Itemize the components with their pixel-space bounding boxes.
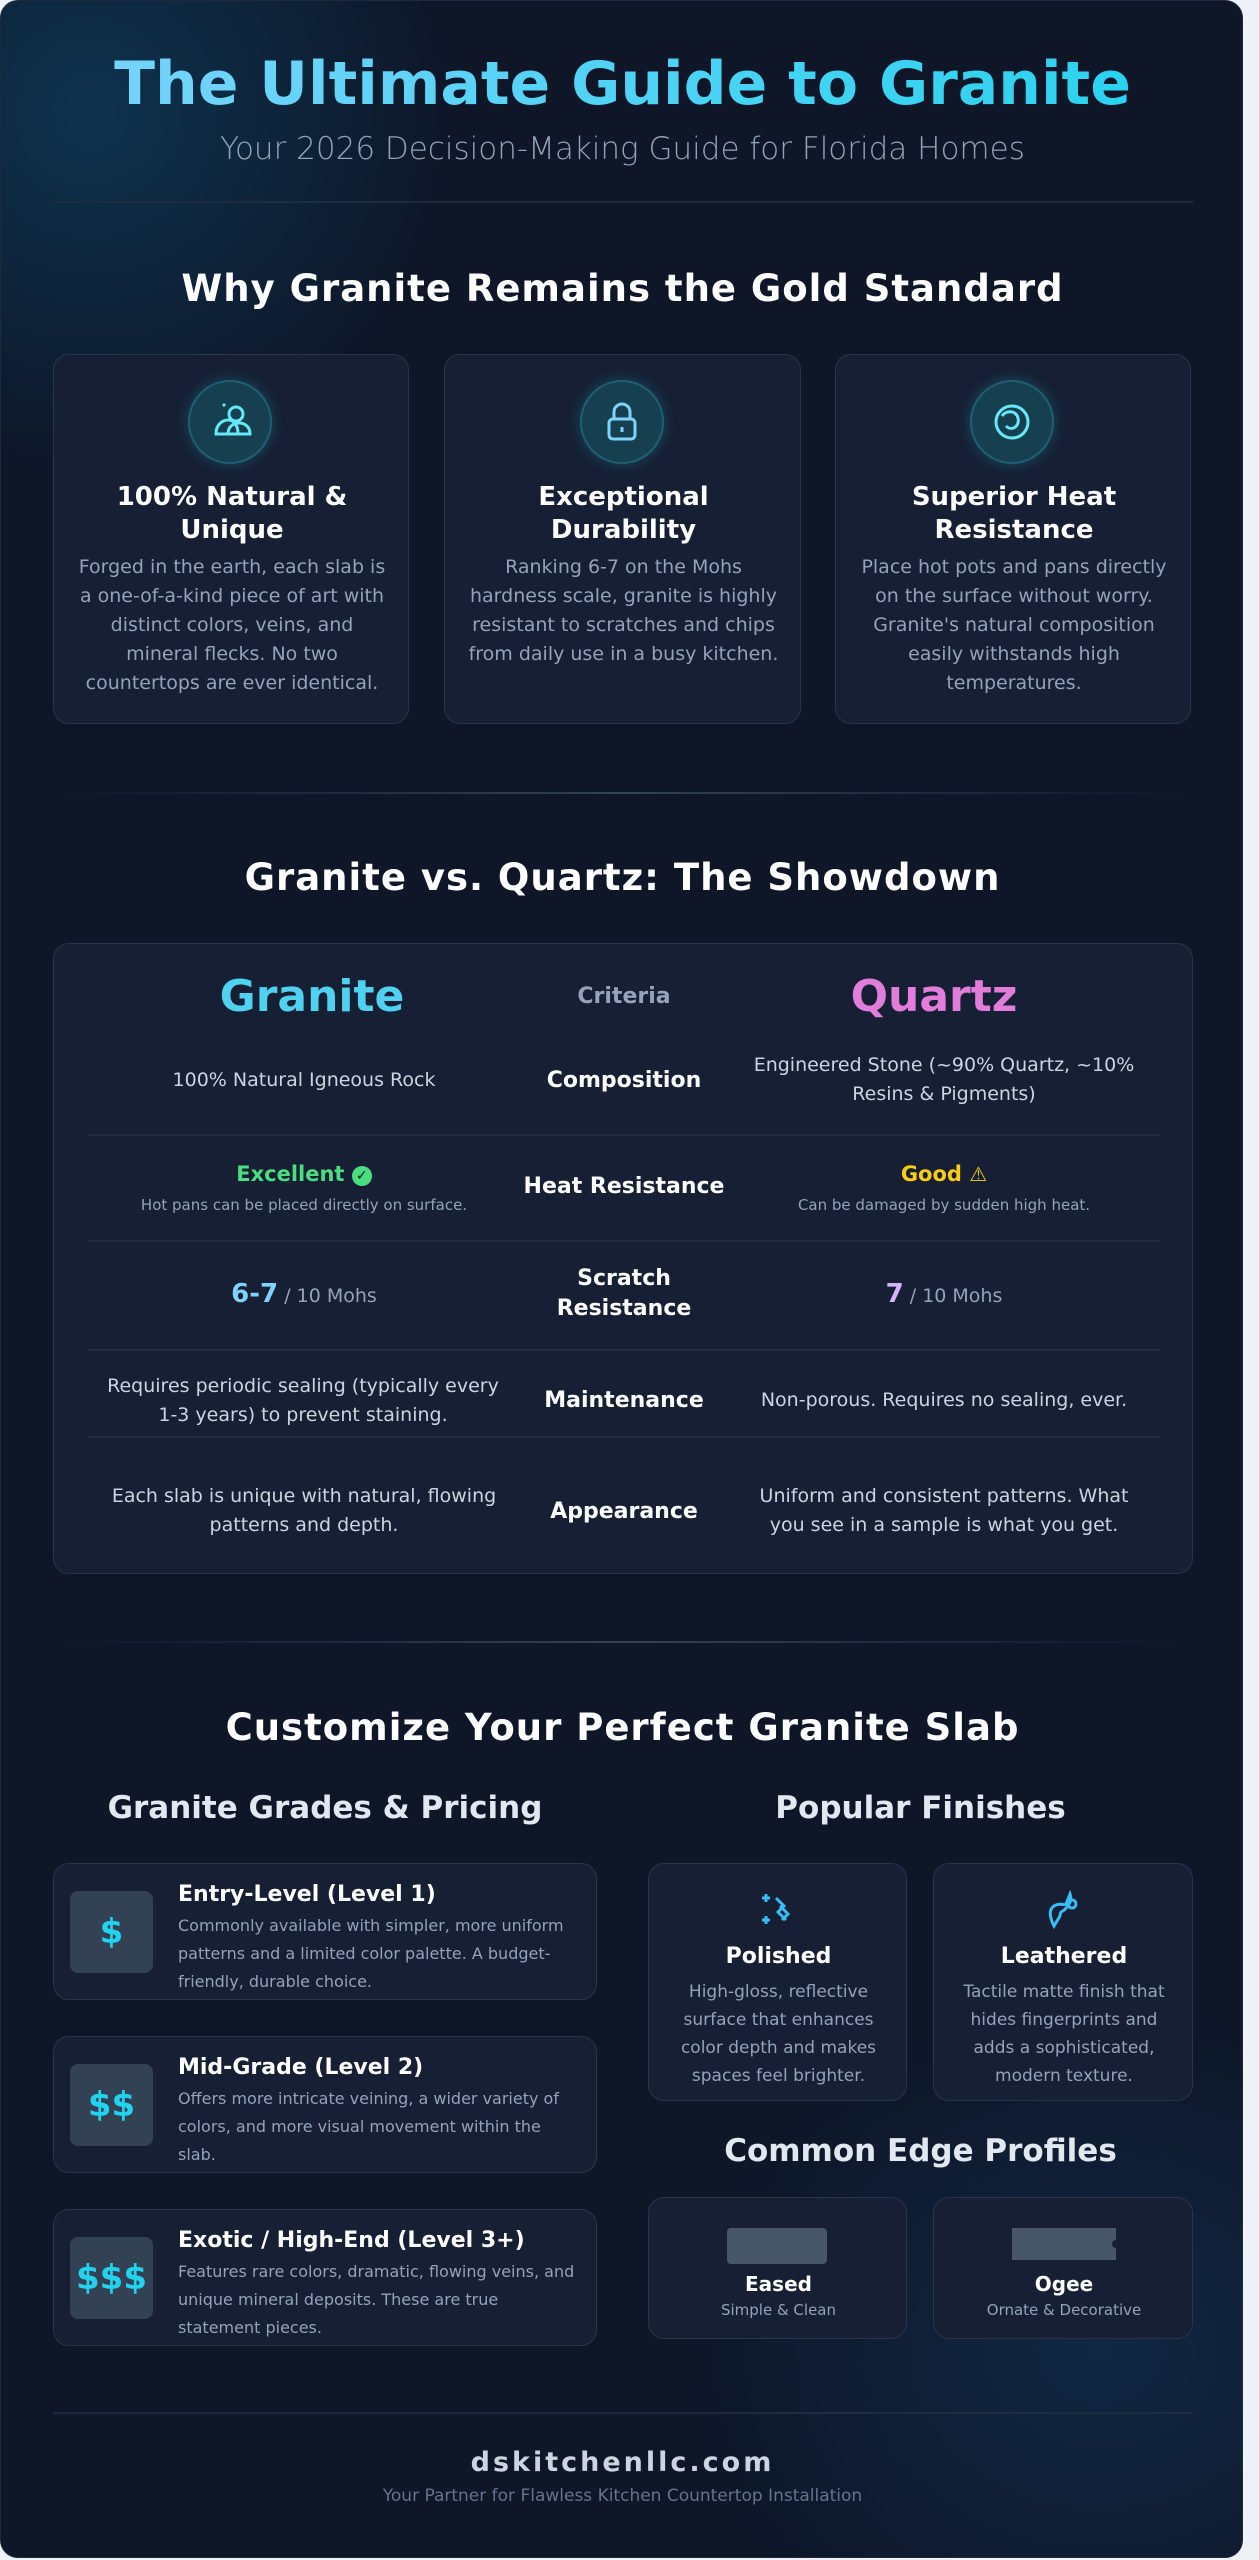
panel: durability: Durability	[551, 515, 696, 545]
edge card: ogee	[933, 2197, 1193, 2339]
subtitle: Your 2026 Decision-Making Guide for Florida Homes	[220, 131, 1025, 167]
panel: natural: 100% Natural &	[117, 482, 347, 512]
icon: lock	[580, 380, 664, 464]
panel: comparison table: Engineered Stone (~90% Quartz, ~10% Resins & Pigments)	[754, 1054, 1134, 1105]
panel: comparison table: Composition	[547, 1068, 701, 1093]
grade card: mid	[53, 2036, 597, 2173]
grade card: exotic: Features rare colors, dramatic, flowing veins, and unique mineral deposits. These are true statement pieces.	[178, 2262, 574, 2337]
panel: heat: Resistance	[934, 515, 1094, 545]
grade card: entry: $	[100, 1912, 123, 1952]
panel: comparison table: Good ⚠	[901, 1162, 987, 1186]
edge card: eased	[648, 2197, 907, 2339]
heading: showdown: Granite vs. Quartz: The Showdown	[245, 856, 1000, 899]
panel: natural: Forged in the earth, each slab is a one-of-a-kind piece of art with distinct colors, veins, and mineral flecks. No two countertops are ever identical.	[79, 556, 385, 694]
edge card: ogee: Ornate & Decorative	[987, 2301, 1141, 2319]
grade card: mid: Offers more intricate veining, a wider variety of colors, and more visual movement within the slab.	[178, 2089, 559, 2164]
panel: heat	[835, 354, 1191, 724]
panel: comparison table: Maintenance	[544, 1388, 704, 1413]
finish card: leathered: Leathered	[1001, 1944, 1127, 1969]
panel: natural: Unique	[180, 515, 284, 545]
heading: grades: Granite Grades & Pricing	[108, 1790, 542, 1826]
edge card: eased: Simple & Clean	[721, 2301, 836, 2319]
edge card: ogee: Ogee	[1035, 2272, 1093, 2296]
panel: comparison table: Hot pans can be placed directly on surface.	[141, 1196, 467, 1214]
heading: finishes: Popular Finishes	[775, 1790, 1066, 1826]
finish card: leathered: Tactile matte finish that hides fingerprints and adds a sophisticated, modern texture.	[963, 1982, 1165, 2086]
finish card: leathered	[933, 1863, 1193, 2101]
title: The Ultimate Guide to Granite	[114, 49, 1131, 119]
footer: site: dskitchenllc.com	[471, 2447, 774, 2478]
panel: comparison table: Appearance	[550, 1499, 698, 1524]
grade card: mid: Mid-Grade (Level 2)	[178, 2055, 423, 2080]
grade card: entry: Commonly available with simpler, more uniform patterns and a limited color palette. A budget-friendly, durable choice.	[178, 1916, 564, 1991]
grade card: mid: $$	[88, 2085, 135, 2125]
row: maintenance: Requires periodic sealing (typically every 1‑3 years) to prevent staining.	[107, 1375, 499, 1426]
row: heat: Excellent	[236, 1162, 344, 1186]
header: criteria: Criteria	[577, 984, 671, 1009]
heading: customize: Customize Your Perfect Granite Slab	[226, 1706, 1019, 1749]
panel: heat: Place hot pots and pans directly on the surface without worry. Granite's natural composition easily withstands high temperatures.	[861, 556, 1167, 694]
panel: durability	[444, 354, 801, 724]
grade card: exotic: $$$	[76, 2258, 147, 2298]
panel: heat: Superior Heat	[912, 482, 1116, 512]
header: granite: Granite	[220, 971, 404, 1022]
grade card: exotic: Exotic / High-End (Level 3+)	[178, 2228, 525, 2253]
icon: person	[188, 380, 272, 464]
grade card: entry	[53, 1863, 597, 2000]
panel: comparison table: Can be damaged by sudden high heat.	[798, 1196, 1090, 1214]
row: composition: 100% Natural Igneous Rock	[173, 1069, 435, 1091]
row: appearance: Each slab is unique with natural, flowing patterns and depth.	[112, 1485, 496, 1536]
icon: swirl	[970, 380, 1054, 464]
panel: comparison table: Non-porous. Requires no sealing, ever.	[761, 1389, 1127, 1411]
grade card: entry: Entry-Level (Level 1)	[178, 1882, 436, 1907]
edge card: eased: Eased	[745, 2272, 812, 2296]
panel: natural	[53, 354, 409, 724]
finish card: polished: High-gloss, reflective surface that enhances color depth and makes spaces feel brighter.	[681, 1982, 876, 2086]
finish card: polished: Polished	[726, 1944, 831, 1969]
row: heat: ✓	[356, 1168, 368, 1184]
icon: hand	[1048, 1890, 1078, 1929]
panel: comparison table: 7 / 10 Mohs	[886, 1279, 1002, 1309]
panel: comparison table: Uniform and consistent patterns. What you see in a sample is what you get.	[760, 1485, 1128, 1536]
panel: durability: Ranking 6-7 on the Mohs hardness scale, granite is highly resistant to scratches and chips from daily use in a busy kitchen.	[469, 556, 778, 665]
panel: comparison table: Heat Resistance	[524, 1174, 724, 1199]
footer: tagline: Your Partner for Flawless Kitchen Countertop Installation	[383, 2486, 862, 2506]
heading: why granite: Why Granite Remains the Gold Standard	[181, 267, 1064, 310]
panel: comparison table	[53, 943, 1193, 1574]
panel: comparison table: Resistance	[557, 1296, 691, 1321]
heading: edge profiles: Common Edge Profiles	[724, 2133, 1117, 2169]
panel: comparison table: Scratch	[577, 1266, 671, 1291]
header: quartz: Quartz	[851, 971, 1017, 1022]
finish card: polished	[648, 1863, 907, 2101]
panel: durability: Exceptional	[538, 482, 709, 512]
icon: sparkle	[762, 1894, 790, 1924]
row: scratch: 6-7 / 10 Mohs	[231, 1279, 377, 1309]
grade card: exotic	[53, 2209, 597, 2346]
